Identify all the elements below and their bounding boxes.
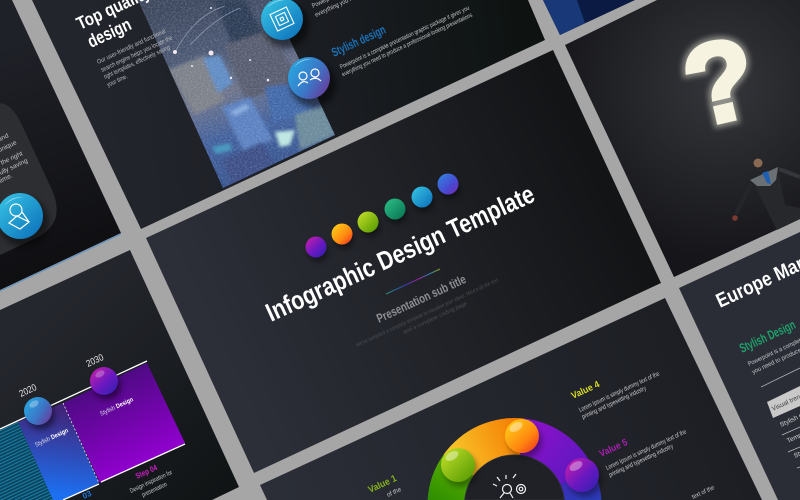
value 5: printing and typesetting industry — [608, 443, 675, 479]
question mark glow: ? — [672, 13, 768, 152]
panel: europe map slide — [679, 232, 800, 500]
city photo — [138, 0, 335, 188]
panel: title slide — [146, 50, 661, 473]
colored balls — [306, 174, 460, 262]
subtitle: Presentation sub title — [374, 272, 468, 326]
table — [767, 386, 800, 468]
step 04 description — [129, 469, 174, 499]
step 04 description: presentation — [141, 481, 169, 499]
year labels: 2020 — [18, 382, 39, 400]
card text: the right — [0, 150, 24, 167]
value 1: Value 1 — [367, 473, 399, 496]
step 04 description: Design inspiration for — [129, 469, 174, 495]
ball: green — [441, 448, 478, 487]
title: Infographic Design Template — [261, 179, 539, 327]
value 4: Lorem Ipsum is simply dummy text of the — [578, 370, 661, 414]
ball 2020 — [24, 397, 55, 430]
heading — [73, 0, 153, 52]
paragraph: Our user-friendly and functional — [96, 28, 167, 66]
panel: top quality design slide — [32, 0, 545, 229]
bar labels: Stylish Design — [34, 427, 70, 449]
year labels — [18, 352, 106, 400]
panel: timeline slide — [0, 250, 239, 500]
panel: value wheel slide — [260, 298, 762, 500]
year labels: 2030 — [85, 352, 106, 370]
value 5: Value 5 — [598, 437, 630, 460]
description: and a complete coding page — [402, 301, 468, 336]
question mark: ? — [672, 13, 768, 152]
bar labels: Stylish Design — [99, 396, 135, 418]
divider — [386, 269, 440, 294]
icon ball: cyan — [0, 193, 49, 247]
ball: purple — [565, 458, 602, 497]
value 4: Value 4 — [570, 379, 602, 402]
paragraph — [96, 28, 174, 89]
center icon — [493, 474, 526, 498]
description — [355, 278, 500, 349]
card text — [0, 132, 29, 185]
heading: stylish design: Stylish design — [329, 23, 388, 60]
panel: question mark slide — [565, 0, 800, 277]
description: We've compiled a complete template to visualise your ideas. Here's all the text — [355, 278, 500, 349]
area: hatched step — [0, 422, 53, 500]
step 04: Step 04 — [134, 463, 159, 481]
icon ball: maze — [261, 0, 309, 48]
bar labels — [34, 396, 135, 449]
heading: design — [84, 14, 134, 52]
rounded card — [0, 103, 57, 255]
axis arrows — [0, 361, 185, 500]
area: blue step — [18, 403, 99, 500]
paragraph: your time. — [106, 73, 129, 89]
paragraph: search engine helps you locate the — [100, 34, 174, 74]
panel: small blue slide — [543, 0, 635, 35]
ring chart — [428, 418, 602, 500]
ball: orange — [505, 419, 542, 458]
panel: top left slide — [0, 0, 121, 291]
value 4: printing and typesetting industry — [581, 385, 648, 421]
value 5: Lorem Ipsum is simply dummy text of the — [605, 428, 688, 472]
paragraph: right templates, effectively saving — [103, 44, 171, 81]
area: purple step — [63, 363, 185, 483]
value 1: of the — [386, 486, 403, 499]
businessman — [732, 158, 800, 230]
icon ball: people — [288, 57, 336, 107]
ball 2030 — [90, 367, 121, 400]
